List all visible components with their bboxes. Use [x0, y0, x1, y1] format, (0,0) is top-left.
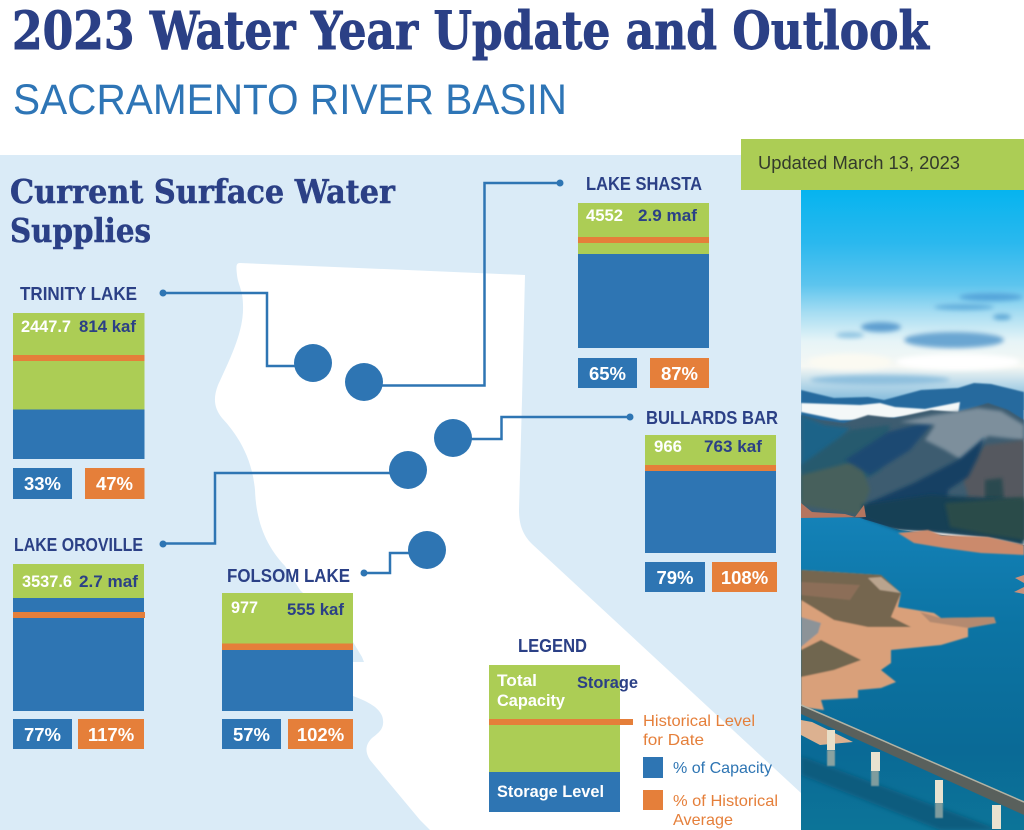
panel: Trinity Lake: TRINITY LAKE — [20, 284, 137, 304]
section heading: Supplies — [10, 211, 151, 250]
water — [801, 515, 1024, 830]
panel: legend: Capacity — [497, 692, 566, 710]
connector: Trinity Lake — [160, 290, 332, 382]
connector: Bullards Bar — [434, 414, 634, 457]
panel: legend: % of Historical — [673, 793, 778, 810]
panel: map background — [0, 155, 802, 830]
update date banner — [741, 139, 1024, 190]
bridge reflection — [801, 756, 1000, 830]
panel: legend: Storage — [577, 674, 638, 692]
panel: legend: LEGEND — [518, 636, 587, 656]
panel: Lake Oroville: 117% — [88, 724, 134, 745]
panel: Lake Shasta: 2.9 maf — [638, 206, 697, 225]
panel: Bullards Bar: BULLARDS BAR — [646, 408, 778, 428]
section heading: Current Surface Water — [10, 172, 396, 211]
main mountain — [801, 403, 1024, 540]
panel: Lake Shasta: 65% — [589, 363, 626, 384]
photo: lake and bridge — [801, 190, 1024, 830]
panel: legend: Storage Level — [497, 783, 604, 801]
bridge — [801, 705, 1024, 829]
panel: Folsom Lake: 977 — [231, 598, 258, 617]
dark valley — [860, 437, 985, 530]
panel: Bullards Bar: 108% — [721, 567, 768, 588]
panel: legend — [489, 636, 778, 829]
panel: Bullards Bar: 763 kaf — [704, 437, 762, 456]
forest above the shoreline — [862, 495, 1024, 546]
connector: Lake Shasta — [345, 180, 564, 401]
map: white region of the basin — [215, 263, 801, 830]
rocky slopes — [900, 408, 1024, 462]
panel: Lake Shasta: 4552 — [586, 206, 623, 225]
panel: Lake Oroville: LAKE OROVILLE — [14, 535, 143, 555]
far shore — [801, 503, 866, 518]
panel: legend: % of Capacity — [673, 760, 772, 777]
panel: legend: Historical Level — [643, 713, 755, 730]
panel: Lake Shasta: LAKE SHASTA — [586, 174, 702, 194]
peninsula — [801, 570, 996, 710]
panel: Trinity Lake: 33% — [24, 473, 61, 494]
panel: Bullards Bar — [645, 408, 778, 592]
connector: Folsom Lake — [360, 531, 446, 576]
panel: Lake Oroville: 2.7 maf — [79, 572, 138, 591]
subtitle: SACRAMENTO RIVER BASIN — [13, 76, 567, 124]
panel: Lake Oroville — [13, 535, 145, 749]
panel: legend: for Date — [643, 732, 704, 749]
update date banner: Updated March 13, 2023 — [758, 152, 960, 173]
connector: Lake Oroville — [160, 451, 427, 548]
panel: Folsom Lake: FOLSOM LAKE — [227, 566, 350, 586]
white cloud band — [801, 402, 960, 420]
distant ridge — [801, 383, 1024, 440]
panel: Folsom Lake: 555 kaf — [287, 600, 344, 619]
panel: Trinity Lake — [13, 284, 144, 499]
panel: Folsom Lake: 102% — [297, 724, 344, 745]
panel: Folsom Lake: 57% — [233, 724, 270, 745]
panel: Lake Oroville: 3537.6 — [22, 572, 72, 591]
panel: Lake Shasta — [578, 174, 709, 388]
panel: Folsom Lake — [222, 566, 353, 749]
panel: Lake Oroville: 77% — [24, 724, 61, 745]
panel: Trinity Lake: 47% — [96, 473, 133, 494]
panel: Trinity Lake: 814 kaf — [79, 317, 136, 336]
panel: Bullards Bar: 79% — [656, 567, 694, 588]
section heading — [10, 172, 396, 250]
panel: Lake Shasta: 87% — [661, 363, 698, 384]
panel: legend: Average — [673, 812, 733, 829]
panel: Trinity Lake: 2447.7 — [21, 317, 71, 336]
panel: legend: Total — [497, 672, 537, 690]
panel: Bullards Bar: 966 — [654, 437, 682, 456]
